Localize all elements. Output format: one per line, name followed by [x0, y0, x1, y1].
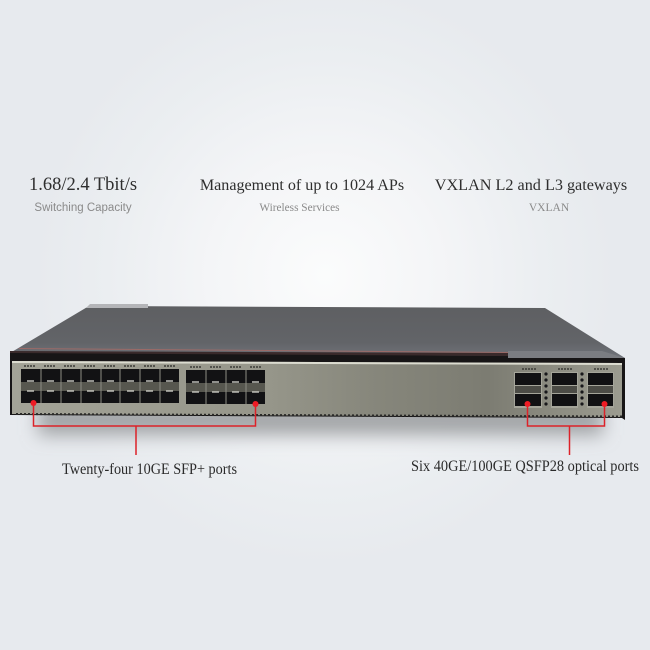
- status LEDs: [544, 372, 584, 406]
- label: SFP+ ports: Twenty-four 10GE SFP+ ports: [62, 461, 237, 478]
- chassis top: [10, 306, 625, 358]
- port labels: [24, 366, 608, 369]
- QSFP28 ports: [514, 372, 614, 408]
- SFP+ ports group 2: [186, 370, 265, 404]
- heading: vxlan: [435, 176, 627, 214]
- black front band: [10, 353, 625, 420]
- red accent line: [18, 348, 508, 353]
- heading: wireless services: [200, 177, 404, 214]
- heading: vxlan: VXLAN: [529, 202, 570, 214]
- callout: QSFP28 bracket: [524, 401, 608, 455]
- front face: [12, 361, 622, 417]
- heading: switching capacity: Switching Capacity: [34, 202, 132, 214]
- brown edge: [10, 351, 508, 356]
- top label tab: [86, 304, 148, 308]
- heading: wireless services: Management of up to 1024 APs: [200, 177, 404, 194]
- heading: vxlan: VXLAN L2 and L3 gateways: [435, 176, 627, 194]
- label: QSFP28 ports: Six 40GE/100GE QSFP28 optical ports: [411, 458, 639, 475]
- heading: wireless services: Wireless Services: [259, 202, 340, 214]
- callout: SFP+ bracket: [30, 400, 258, 455]
- heading: switching capacity: [29, 175, 137, 214]
- switch chassis: [10, 304, 625, 420]
- floor shadow: [38, 405, 603, 435]
- vent holes: [16, 414, 622, 416]
- heading: switching capacity: 1.68/2.4 Tbit/s: [29, 175, 137, 195]
- front lip: [508, 351, 625, 358]
- SFP+ ports group 1: [21, 369, 179, 403]
